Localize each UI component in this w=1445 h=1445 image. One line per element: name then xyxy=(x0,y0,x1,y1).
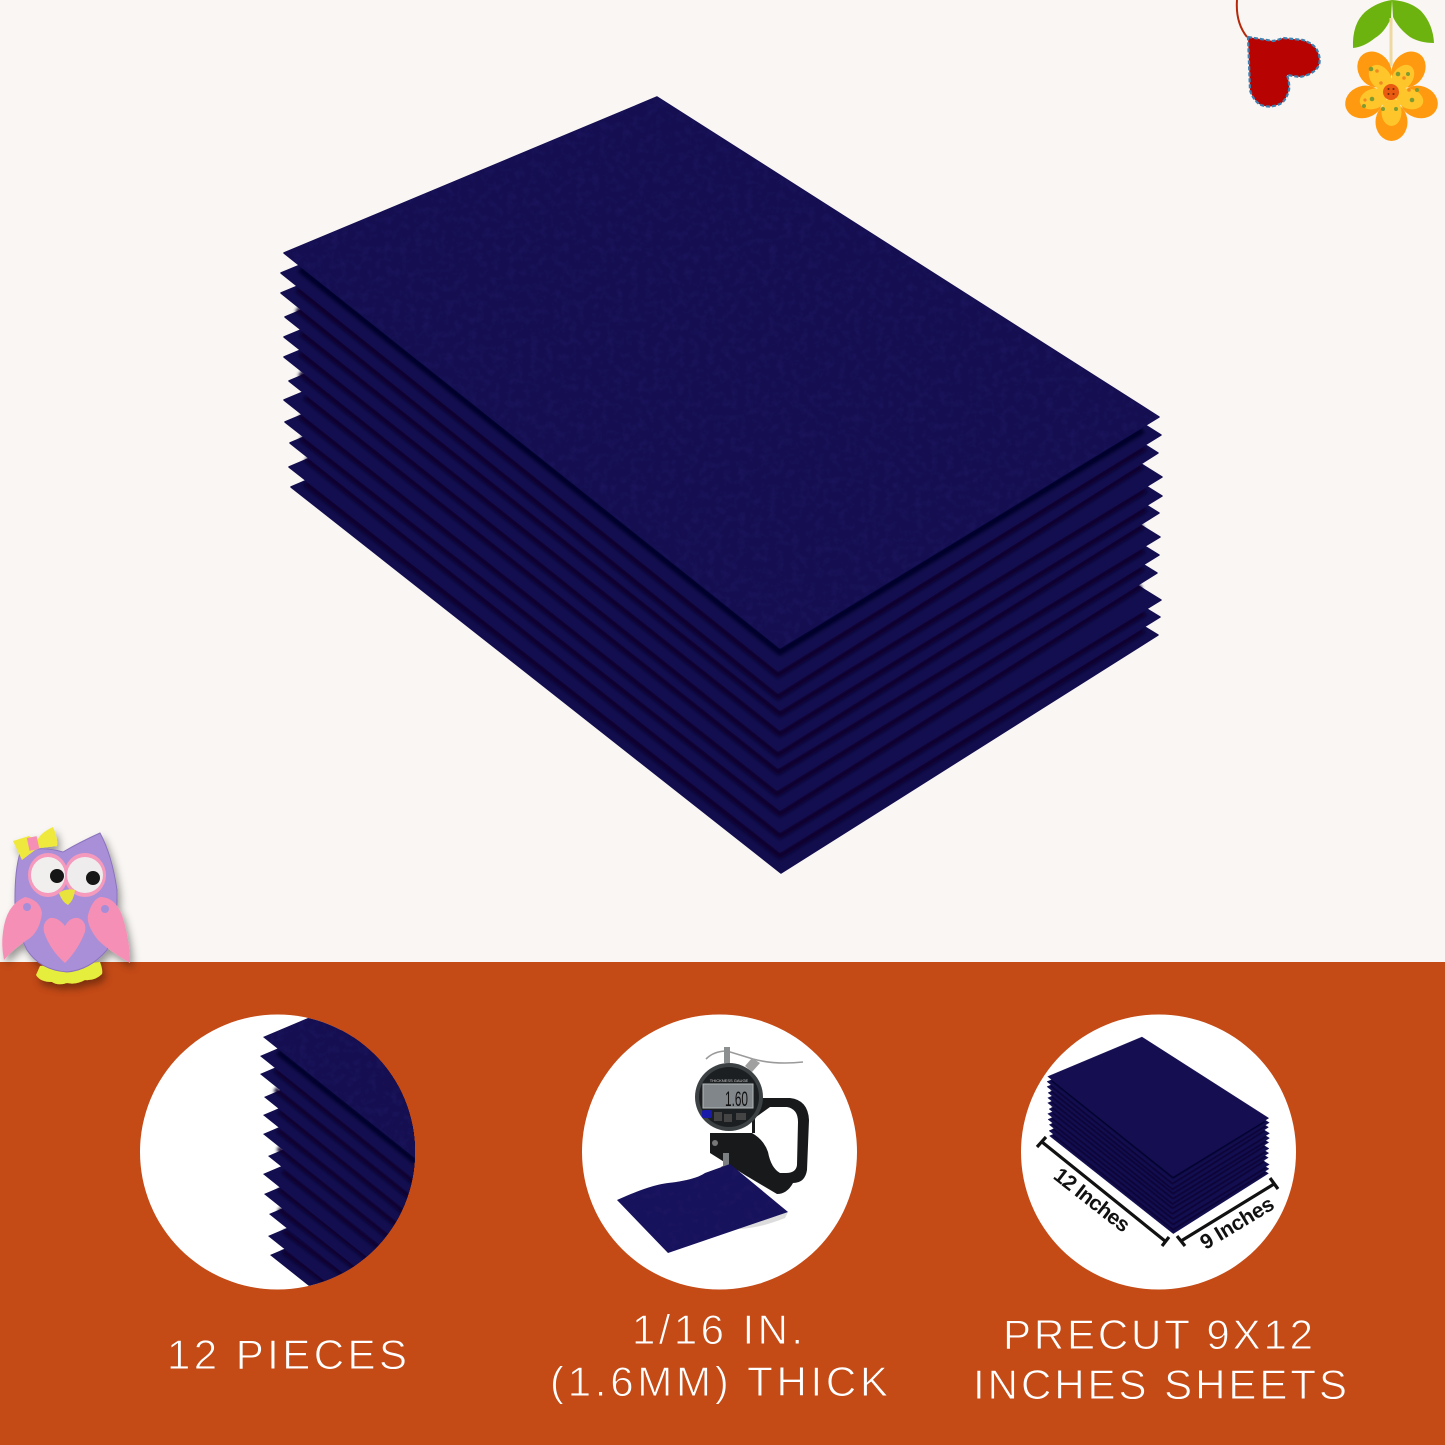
owl wings xyxy=(2,897,42,960)
owl heart xyxy=(44,918,85,963)
felt sheet under gauge xyxy=(617,1164,788,1253)
small stack of sheets xyxy=(1047,1037,1270,1234)
orange bottom banner xyxy=(0,962,1445,1445)
dimension arrow: 12 inches xyxy=(1037,1137,1169,1246)
close-up of sheet edges xyxy=(260,1014,416,1290)
dimension label: 12 inches: 12 Inches xyxy=(1049,1164,1134,1237)
panel: sheet size xyxy=(973,1014,1347,1408)
white circle xyxy=(140,1014,415,1290)
panel: 12 pieces xyxy=(140,1014,416,1378)
owl body xyxy=(15,833,117,972)
dimension arrow: 9 inches xyxy=(1177,1178,1278,1246)
main stack of navy felt sheets xyxy=(281,97,1162,873)
panel: sheet size: INCHES SHEETS xyxy=(973,1361,1347,1408)
icon: orange felt flower with green leaves xyxy=(1341,0,1442,141)
panel: thickness xyxy=(550,1014,888,1405)
icon: red felt heart ornament xyxy=(1237,0,1320,106)
owl eyes xyxy=(28,853,68,897)
dimension label: 9 inches: 9 Inches xyxy=(1196,1192,1278,1254)
owl buttons xyxy=(23,903,31,911)
caption: 12 pieces: 12 PIECES xyxy=(167,1331,407,1378)
white circle xyxy=(582,1014,857,1290)
caption: thickness: 1/16 IN. xyxy=(632,1306,803,1353)
caption: sheet size: PRECUT 9X12 xyxy=(1003,1311,1313,1358)
panel: thickness: (1.6MM) THICK xyxy=(550,1358,888,1405)
top sheet felt texture xyxy=(284,97,1159,648)
icon: digital thickness gauge: THICKNESS GAUGE xyxy=(710,1078,749,1083)
owl beak xyxy=(59,889,75,905)
owl feet xyxy=(36,962,102,984)
icon: digital thickness gauge xyxy=(695,1047,809,1194)
white circle xyxy=(1021,1014,1296,1290)
icon: digital thickness gauge: 1.60 xyxy=(725,1088,748,1111)
icon: purple felt owl xyxy=(2,827,130,984)
owl bow xyxy=(13,827,57,860)
